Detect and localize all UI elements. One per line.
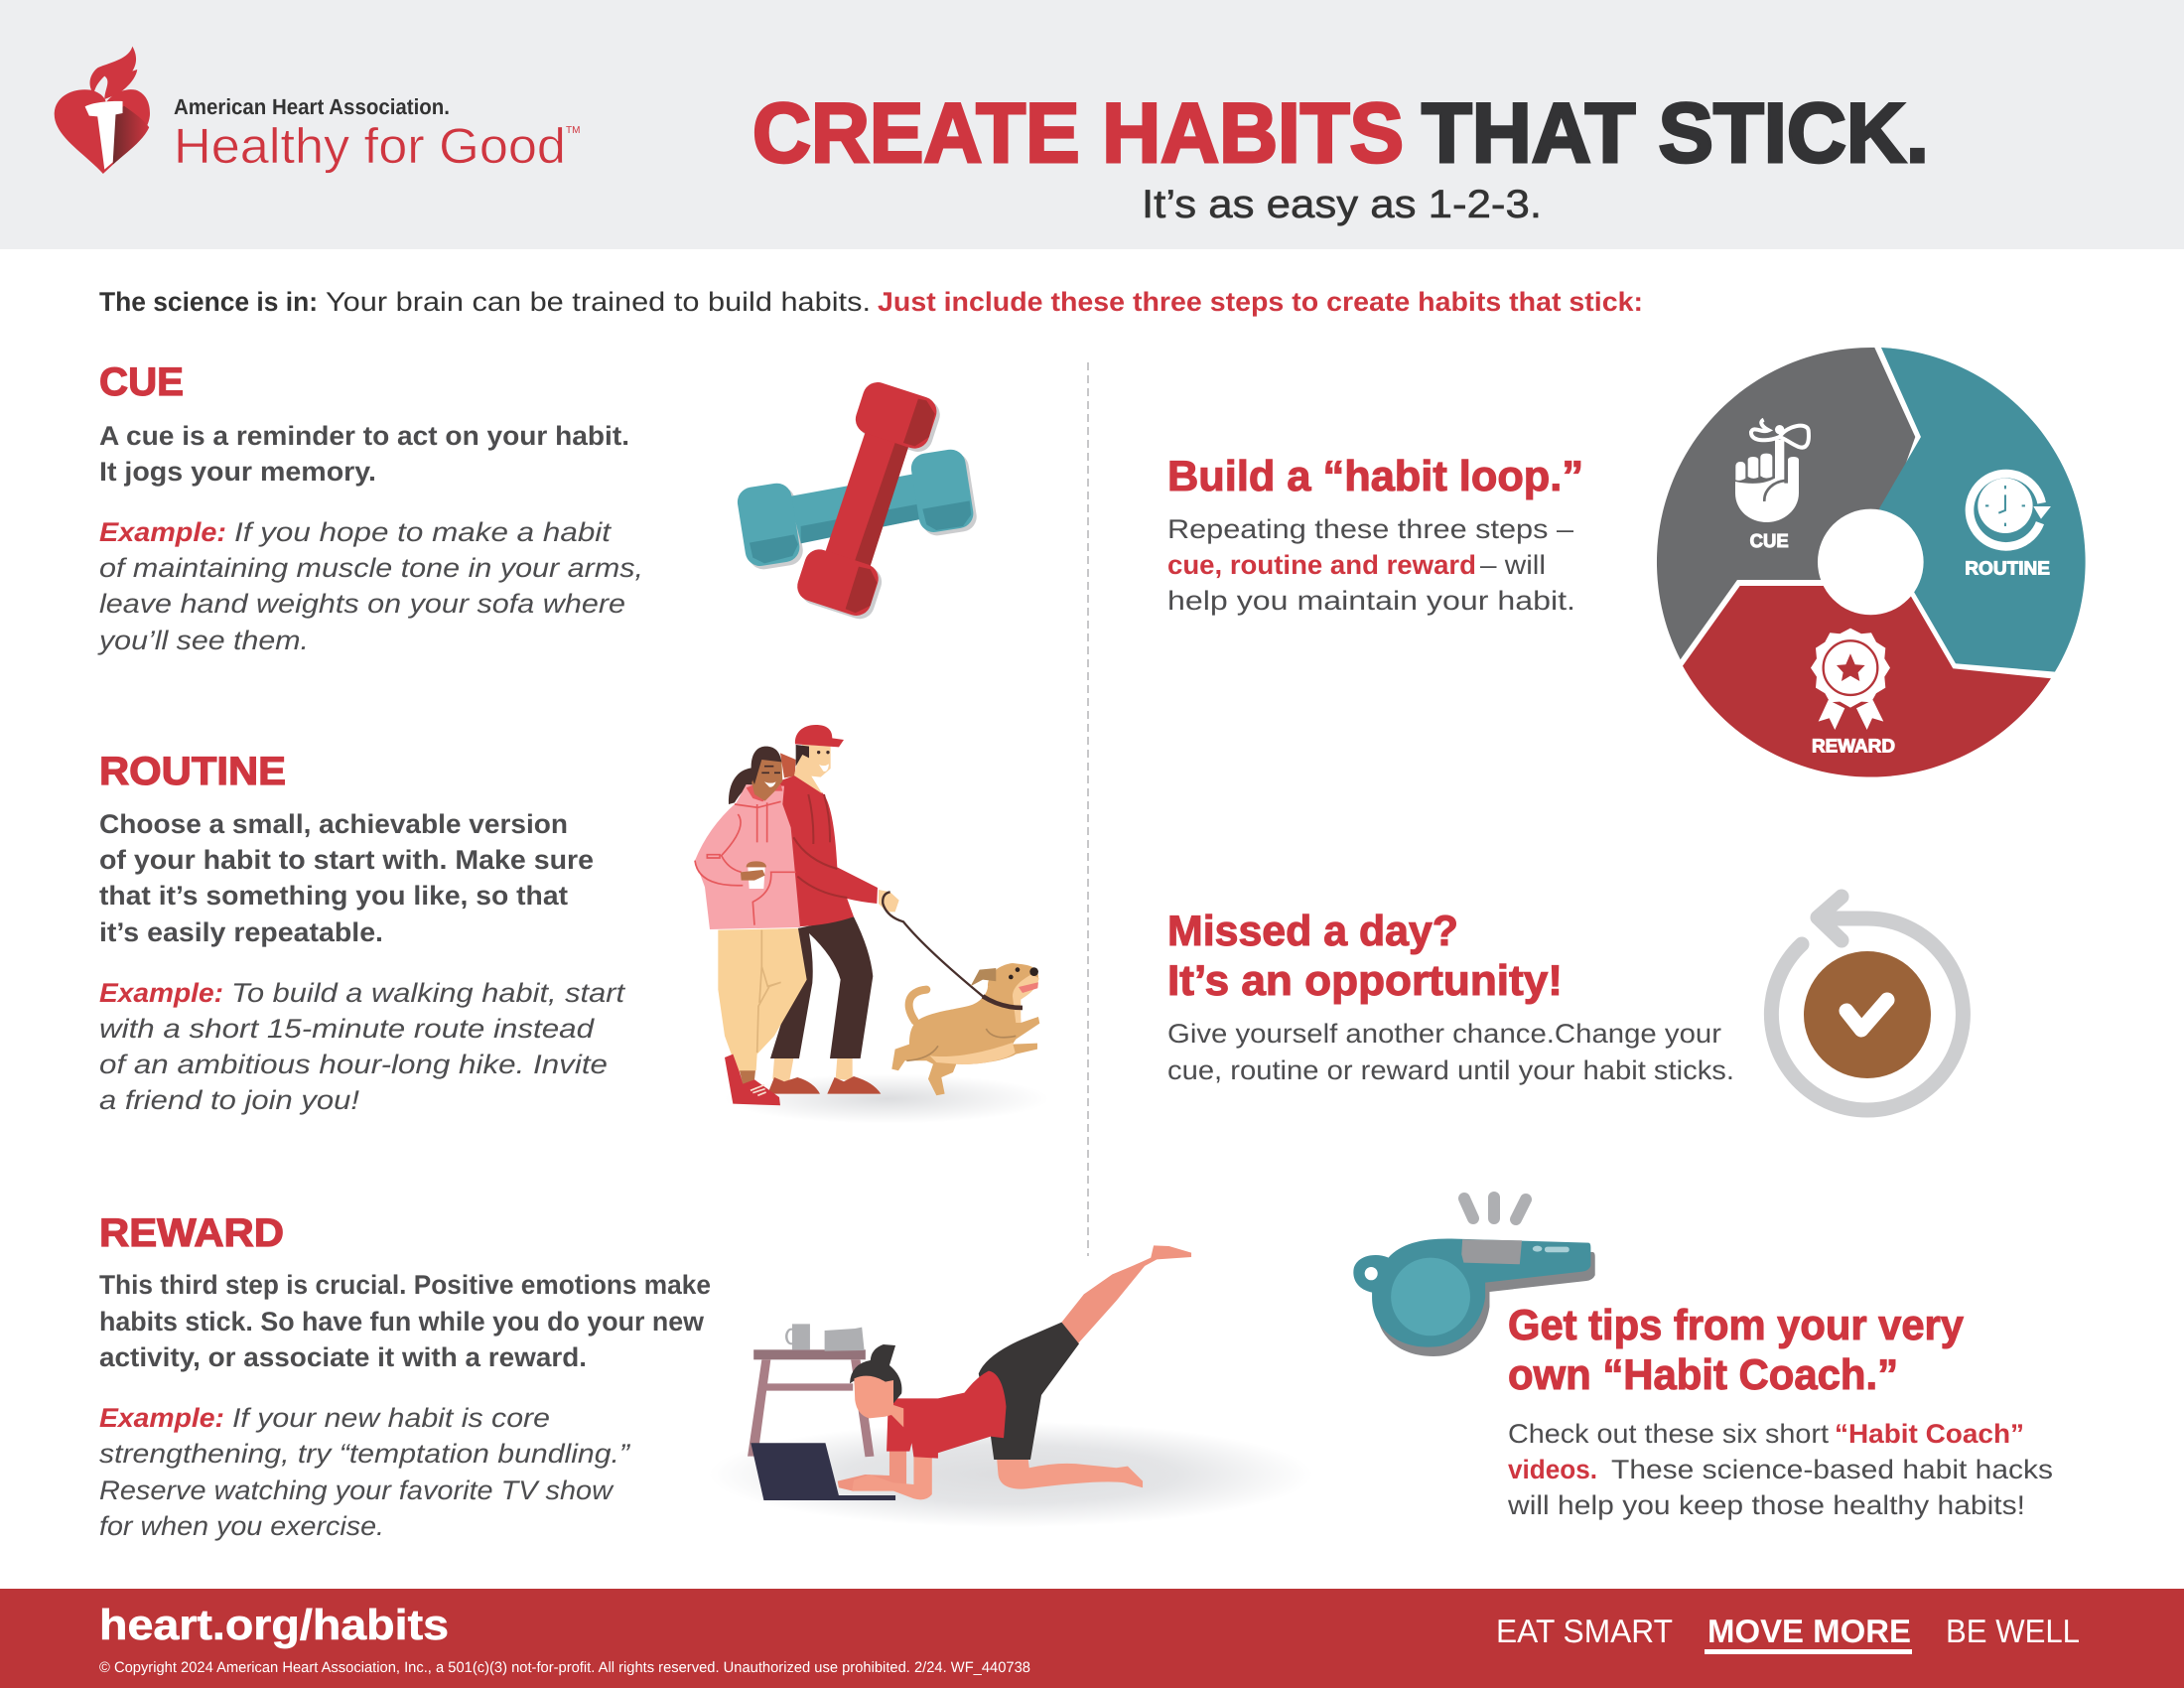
text block: habit coach: videos. xyxy=(1508,1455,1597,1484)
text block: reward example: Example: xyxy=(99,1403,224,1433)
laptop xyxy=(751,1443,895,1500)
illustration: couple walking a dog xyxy=(695,725,1049,1124)
heading: habit coach: own “Habit Coach.” xyxy=(1508,1351,1898,1399)
intro sentence: Your brain can be trained to build habits. xyxy=(326,287,871,317)
copyright: © Copyright 2024 American Heart Association, Inc., a 501(c)(3) not-for-profit. All rights reserved. Unauthorized use prohibited. 2/24. WF_440738 xyxy=(99,1659,1030,1676)
text block: reward example xyxy=(99,1403,630,1541)
heading: habit coach: Get tips from your very xyxy=(1508,1302,1964,1349)
heading: habit coach xyxy=(1508,1302,1964,1399)
text block: cue example: leave hand weights on your sofa where xyxy=(99,589,625,619)
text block: cue example xyxy=(97,517,643,655)
text block: routine description xyxy=(99,809,594,947)
leash xyxy=(883,892,1023,1008)
panel: reward xyxy=(99,1211,711,1541)
text block: cue example: Example: xyxy=(99,517,226,547)
text block: reward description xyxy=(99,1270,711,1372)
heading: reward: REWARD xyxy=(99,1211,284,1255)
text block: routine example: with a short 15-minute route instead xyxy=(99,1014,595,1044)
title xyxy=(752,86,1929,181)
panel: missed a day xyxy=(1167,908,1734,1085)
text block: habit coach xyxy=(1507,1419,2053,1520)
illustration: woman exercising in front of a laptop xyxy=(709,1245,1313,1527)
title: THAT STICK. xyxy=(1422,86,1929,181)
subtitle: It’s as easy as 1-2-3. xyxy=(1142,183,1542,226)
logo wordmark: American Heart Association. xyxy=(174,94,450,119)
icon: whistle xyxy=(1353,1197,1595,1356)
text block: reward example: If your new habit is core xyxy=(232,1403,550,1433)
label: routine: ROUTINE xyxy=(1965,557,2050,579)
text block: reward description: activity, or associate it with a reward. xyxy=(99,1342,587,1372)
icon: circular arrow with checkmark xyxy=(1771,897,1963,1110)
text block: reward description: This third step is crucial. Positive emotions make xyxy=(99,1270,711,1300)
footer url: heart.org/habits xyxy=(99,1602,449,1649)
text block: cue description xyxy=(99,421,629,487)
text block: routine description: of your habit to start with. Make sure xyxy=(99,845,594,875)
logo: American Heart Association Healthy for Good: TM xyxy=(566,125,580,136)
logo: American Heart Association Healthy for Good: Healthy for Good xyxy=(174,118,566,174)
panel: cue xyxy=(97,360,643,655)
tagline xyxy=(1496,1613,2080,1654)
icon: dumbbells xyxy=(736,378,979,623)
text block: routine description: Choose a small, achievable version xyxy=(99,809,568,839)
text block: routine description: that it’s something you like, so that xyxy=(99,881,568,911)
chart: habit loop wheel xyxy=(1657,348,2086,777)
text block: habit coach: These science-based habit hacks xyxy=(1611,1455,2053,1484)
table with mug and box xyxy=(748,1324,874,1457)
text block: cue description: It jogs your memory. xyxy=(99,457,376,487)
tagline: EAT SMART xyxy=(1496,1613,1673,1649)
icon: heart and torch xyxy=(55,47,150,174)
woman xyxy=(838,1245,1191,1499)
text block: habit coach: “Habit Coach” xyxy=(1835,1419,2024,1449)
text block: missed a day: Give yourself another chance.Change your xyxy=(1167,1019,1721,1049)
text block: loop description: cue, routine and reward xyxy=(1167,550,1476,580)
heading: build a habit loop: Build a “habit loop.” xyxy=(1167,453,1583,500)
text block: cue example: If you hope to make a habit xyxy=(234,517,613,547)
label: cue: CUE xyxy=(1750,530,1789,551)
text block: cue description: A cue is a reminder to act on your habit. xyxy=(99,421,629,451)
heading: routine: ROUTINE xyxy=(99,750,286,793)
heading: missed a day xyxy=(1167,908,1563,1005)
dog xyxy=(891,963,1039,1095)
text block: reward example: for when you exercise. xyxy=(99,1511,384,1541)
text block: cue example: of maintaining muscle tone in your arms, xyxy=(99,553,643,583)
text block: routine example: To build a walking habit, start xyxy=(231,978,626,1008)
man xyxy=(767,725,899,1094)
text block: habit coach: Check out these six short xyxy=(1508,1419,1830,1449)
heading: cue: CUE xyxy=(99,360,184,404)
text block: missed a day xyxy=(1167,1019,1734,1085)
icon: finger with ribbon xyxy=(1735,420,1809,522)
panel: habit coach tips xyxy=(1507,1302,2053,1520)
panel: build a habit loop xyxy=(1167,453,1583,616)
text block: routine example: Example: xyxy=(99,978,223,1008)
heading: missed a day: Missed a day? xyxy=(1167,908,1458,955)
intro sentence xyxy=(99,287,1643,317)
intro sentence: The science is in: xyxy=(99,287,318,317)
header band xyxy=(0,0,2184,249)
woman xyxy=(695,747,807,1105)
text block: missed a day: cue, routine or reward until your habit sticks. xyxy=(1167,1055,1734,1085)
panel: routine xyxy=(99,750,626,1115)
logo: American Heart Association Healthy for Good xyxy=(55,47,580,174)
text block: routine example: a friend to join you! xyxy=(99,1085,360,1115)
tagline: MOVE MORE xyxy=(1707,1613,1911,1649)
title: CREATE HABITS xyxy=(752,86,1404,181)
text block: reward example: strengthening, try “temptation bundling.” xyxy=(99,1439,630,1469)
text block: habit coach: will help you keep those healthy habits! xyxy=(1507,1490,2025,1520)
icon: award ribbon xyxy=(1811,629,1890,730)
text block: routine description: it’s easily repeatable. xyxy=(99,917,383,947)
text block: routine example: of an ambitious hour-long hike. Invite xyxy=(99,1050,608,1079)
heading: missed a day: It’s an opportunity! xyxy=(1167,957,1563,1005)
text block: loop description xyxy=(1167,514,1575,616)
tagline: BE WELL xyxy=(1946,1613,2080,1649)
text block: loop description: Repeating these three steps – xyxy=(1167,514,1573,544)
text block: cue example: you’ll see them. xyxy=(97,626,309,655)
text block: reward description: habits stick. So have fun while you do your new xyxy=(99,1307,705,1336)
text block: reward example: Reserve watching your favorite TV show xyxy=(99,1476,614,1505)
label: reward: REWARD xyxy=(1812,736,1895,757)
icon: clock with arrow xyxy=(1970,474,2051,546)
text block: routine example xyxy=(99,978,626,1115)
text block: loop description: – will xyxy=(1480,550,1546,580)
intro sentence: Just include these three steps to create habits that stick: xyxy=(878,287,1643,317)
text block: loop description: help you maintain your habit. xyxy=(1167,586,1575,616)
footer band xyxy=(0,1589,2184,1688)
